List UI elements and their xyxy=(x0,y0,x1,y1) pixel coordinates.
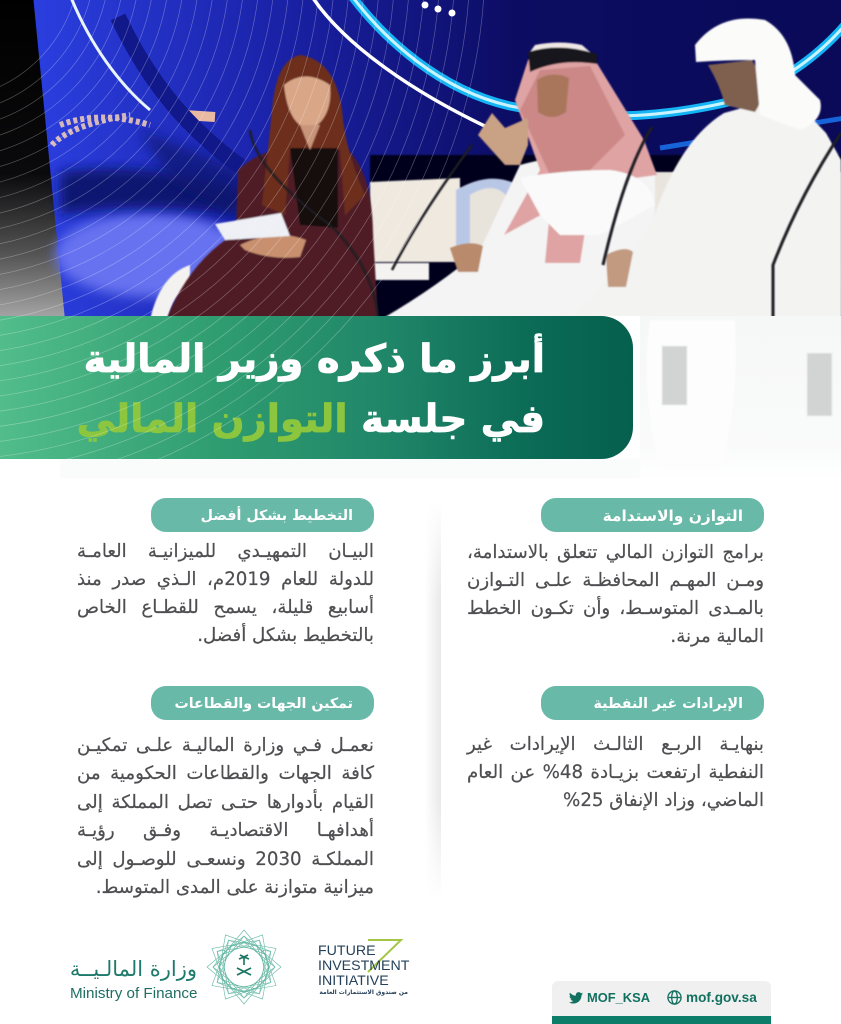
panel: balance and sustainability xyxy=(467,498,764,647)
body text: ومـن المهـم المحافظـة علـى التـوازن xyxy=(467,570,764,591)
ministry name Arabic: وزارة المالـيــة xyxy=(70,957,197,981)
icon: twitter bird xyxy=(569,992,583,1004)
heading pill xyxy=(151,686,374,720)
logo: Ministry of Finance xyxy=(70,930,282,1004)
body text: الماضي، وزاد الإنفاق 25% xyxy=(563,790,764,811)
green footer strip xyxy=(552,1016,771,1024)
green seven mark xyxy=(367,939,404,973)
title line 1: أبرز ما ذكره وزير المالية xyxy=(84,337,545,382)
body text: المملكـة 2030 ونسعـى للوصـول إلى xyxy=(77,849,374,870)
heading pill xyxy=(541,686,764,720)
heading pill: التخطيط بشكل أفضل xyxy=(201,508,353,524)
contact bar xyxy=(552,981,771,1024)
title line 2: في جلسة التوازن المالي xyxy=(77,397,545,442)
contour line overlay xyxy=(0,0,484,459)
panel: non-oil revenue xyxy=(466,686,764,811)
body text: نعمـل فـي وزارة الماليـة علـى تمكيـن xyxy=(77,735,374,756)
logo: Future Investment Initiative xyxy=(318,939,410,996)
FII arabic tagline: من صندوق الاستثمارات العامة xyxy=(319,989,408,996)
body text: أسابيع قليلة، يسمح للقطـاع الخاص xyxy=(77,597,374,618)
body text: النفطية ارتفعت بزيـادة 48% عن العام xyxy=(467,762,764,783)
hero photo xyxy=(0,0,841,418)
title banner xyxy=(0,316,633,459)
sofa and chairs xyxy=(150,172,841,320)
minister in red keffiyeh xyxy=(380,42,657,320)
FII wordmark xyxy=(318,943,410,989)
column divider shadow xyxy=(431,537,441,863)
heading pill xyxy=(541,498,764,532)
FII wordmark: INITIATIVE xyxy=(318,973,389,989)
body text xyxy=(77,541,374,646)
body text: ميزانية متوازنة على المدى المتوسط. xyxy=(96,877,374,898)
body text xyxy=(467,542,764,647)
ministry name English: Ministry of Finance xyxy=(70,985,197,1002)
icon: rosette emblem xyxy=(206,930,282,1004)
faded lower part of photo xyxy=(0,316,841,480)
body text: بنهايـة الربـع الثالـث الإيرادات غير xyxy=(467,734,764,755)
stage screen backdrop xyxy=(0,0,841,325)
man on the right in white headdress xyxy=(606,17,841,316)
heading pill: تمكين الجهات والقطاعات xyxy=(174,696,353,712)
body text: بالمـدى المتوسـط، وأن تكـون الخطط xyxy=(467,598,764,619)
body text xyxy=(466,734,764,811)
body text: كافة الجهات والقطاعات الحكومية من xyxy=(77,763,374,784)
heading pill: التوازن والاستدامة xyxy=(603,507,743,525)
FII wordmark: INVESTMENT xyxy=(318,958,409,974)
microphones xyxy=(250,127,841,320)
icon: globe xyxy=(667,990,682,1005)
body text: أهدافهـا الاقتصاديـة وفـق رؤيـة xyxy=(77,820,374,841)
body text: للدولة للعام 2019م، الـذي صدر منذ xyxy=(77,569,374,590)
body text: برامج التوازن المالي تتعلق بالاستدامة، xyxy=(467,542,764,563)
body text: البيـان التمهيـدي للميزانيـة العامـة xyxy=(77,541,374,562)
heading pill: الإيرادات غير النفطية xyxy=(594,696,743,712)
FII wordmark: FUTURE xyxy=(318,943,376,959)
panel: better planning xyxy=(77,498,374,646)
body text: بالتخطيط بشكل أفضل. xyxy=(197,625,374,646)
body text: القيام بأدوارها حتـى تصل المملكة إلى xyxy=(77,792,374,813)
twitter handle: MOF_KSA xyxy=(587,990,650,1005)
panel: empowering sectors xyxy=(77,686,374,898)
body text xyxy=(77,735,374,898)
heading pill xyxy=(151,498,374,532)
body text: المالية مرنة. xyxy=(670,626,764,647)
woman moderator xyxy=(166,55,378,320)
website: mof.gov.sa xyxy=(686,990,757,1005)
